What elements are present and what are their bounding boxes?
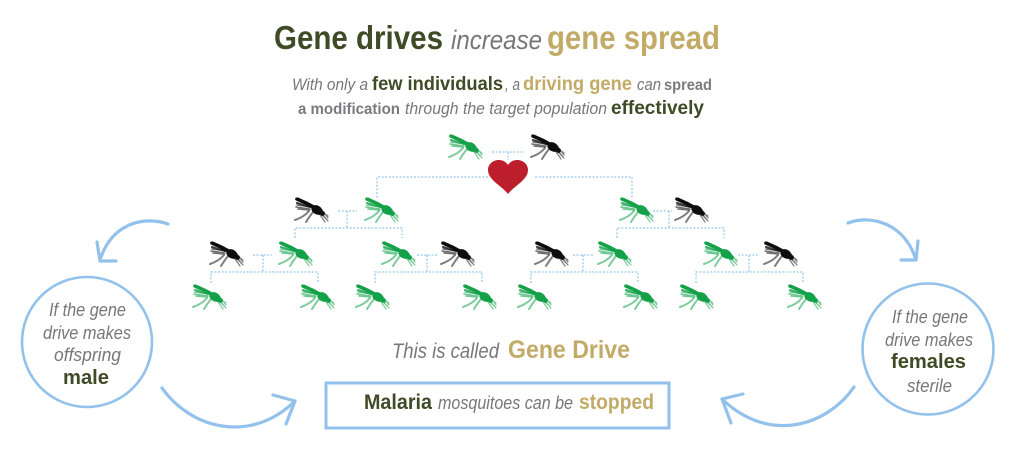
mosquitoes: parent generation <box>449 136 564 159</box>
subtitle: spread <box>664 77 712 94</box>
family tree connector lines <box>211 152 803 283</box>
title: gene spread <box>547 19 720 56</box>
subtitle: can <box>637 75 661 94</box>
subtitle <box>292 74 712 119</box>
panel: male circle: If the gene <box>49 300 126 320</box>
subtitle: effectively <box>611 98 704 119</box>
subtitle: driving gene <box>523 74 632 95</box>
arrow: females circle to result box <box>722 387 854 426</box>
title: Gene drives <box>274 19 443 56</box>
panel: females circle: If the gene <box>892 307 968 327</box>
panel: male circle: offspring <box>54 345 121 365</box>
callout: malaria mosquitoes can be stopped: mosquitoes can be <box>438 393 573 413</box>
panel: male circle: drive makes <box>43 323 131 343</box>
mosquitoes: second generation <box>295 199 708 222</box>
arrow: top left curving to male circle <box>97 221 168 261</box>
subtitle: With only a <box>292 75 368 94</box>
panel: females circle: sterile <box>907 376 952 396</box>
mosquitoes: third generation <box>210 243 797 266</box>
subtitle: through the target population <box>405 99 607 118</box>
icon: heart <box>488 160 528 194</box>
panel: females circle: females <box>891 351 966 373</box>
callout: malaria mosquitoes can be stopped <box>326 383 669 428</box>
callout: malaria mosquitoes can be stopped: Malaria <box>364 391 432 414</box>
heading: this is called gene drive <box>392 336 630 364</box>
panel: females circle <box>862 284 994 414</box>
callout: malaria mosquitoes can be stopped: stopped <box>579 391 654 414</box>
heading: this is called gene drive: This is called <box>392 340 500 363</box>
subtitle: , a <box>505 75 520 94</box>
panel: male circle <box>22 277 152 407</box>
subtitle: few individuals <box>372 74 503 95</box>
subtitle: a modification <box>298 101 400 118</box>
panel: male circle: male <box>63 367 109 389</box>
title: increase <box>451 25 542 55</box>
title <box>274 19 720 56</box>
panel: females circle: drive makes <box>885 330 973 350</box>
arrow: male circle to result box <box>162 388 295 427</box>
arrow: top right curving to females circle <box>848 220 918 260</box>
mosquitoes: fourth generation <box>193 286 821 309</box>
heading: this is called gene drive: Gene Drive <box>508 336 630 364</box>
